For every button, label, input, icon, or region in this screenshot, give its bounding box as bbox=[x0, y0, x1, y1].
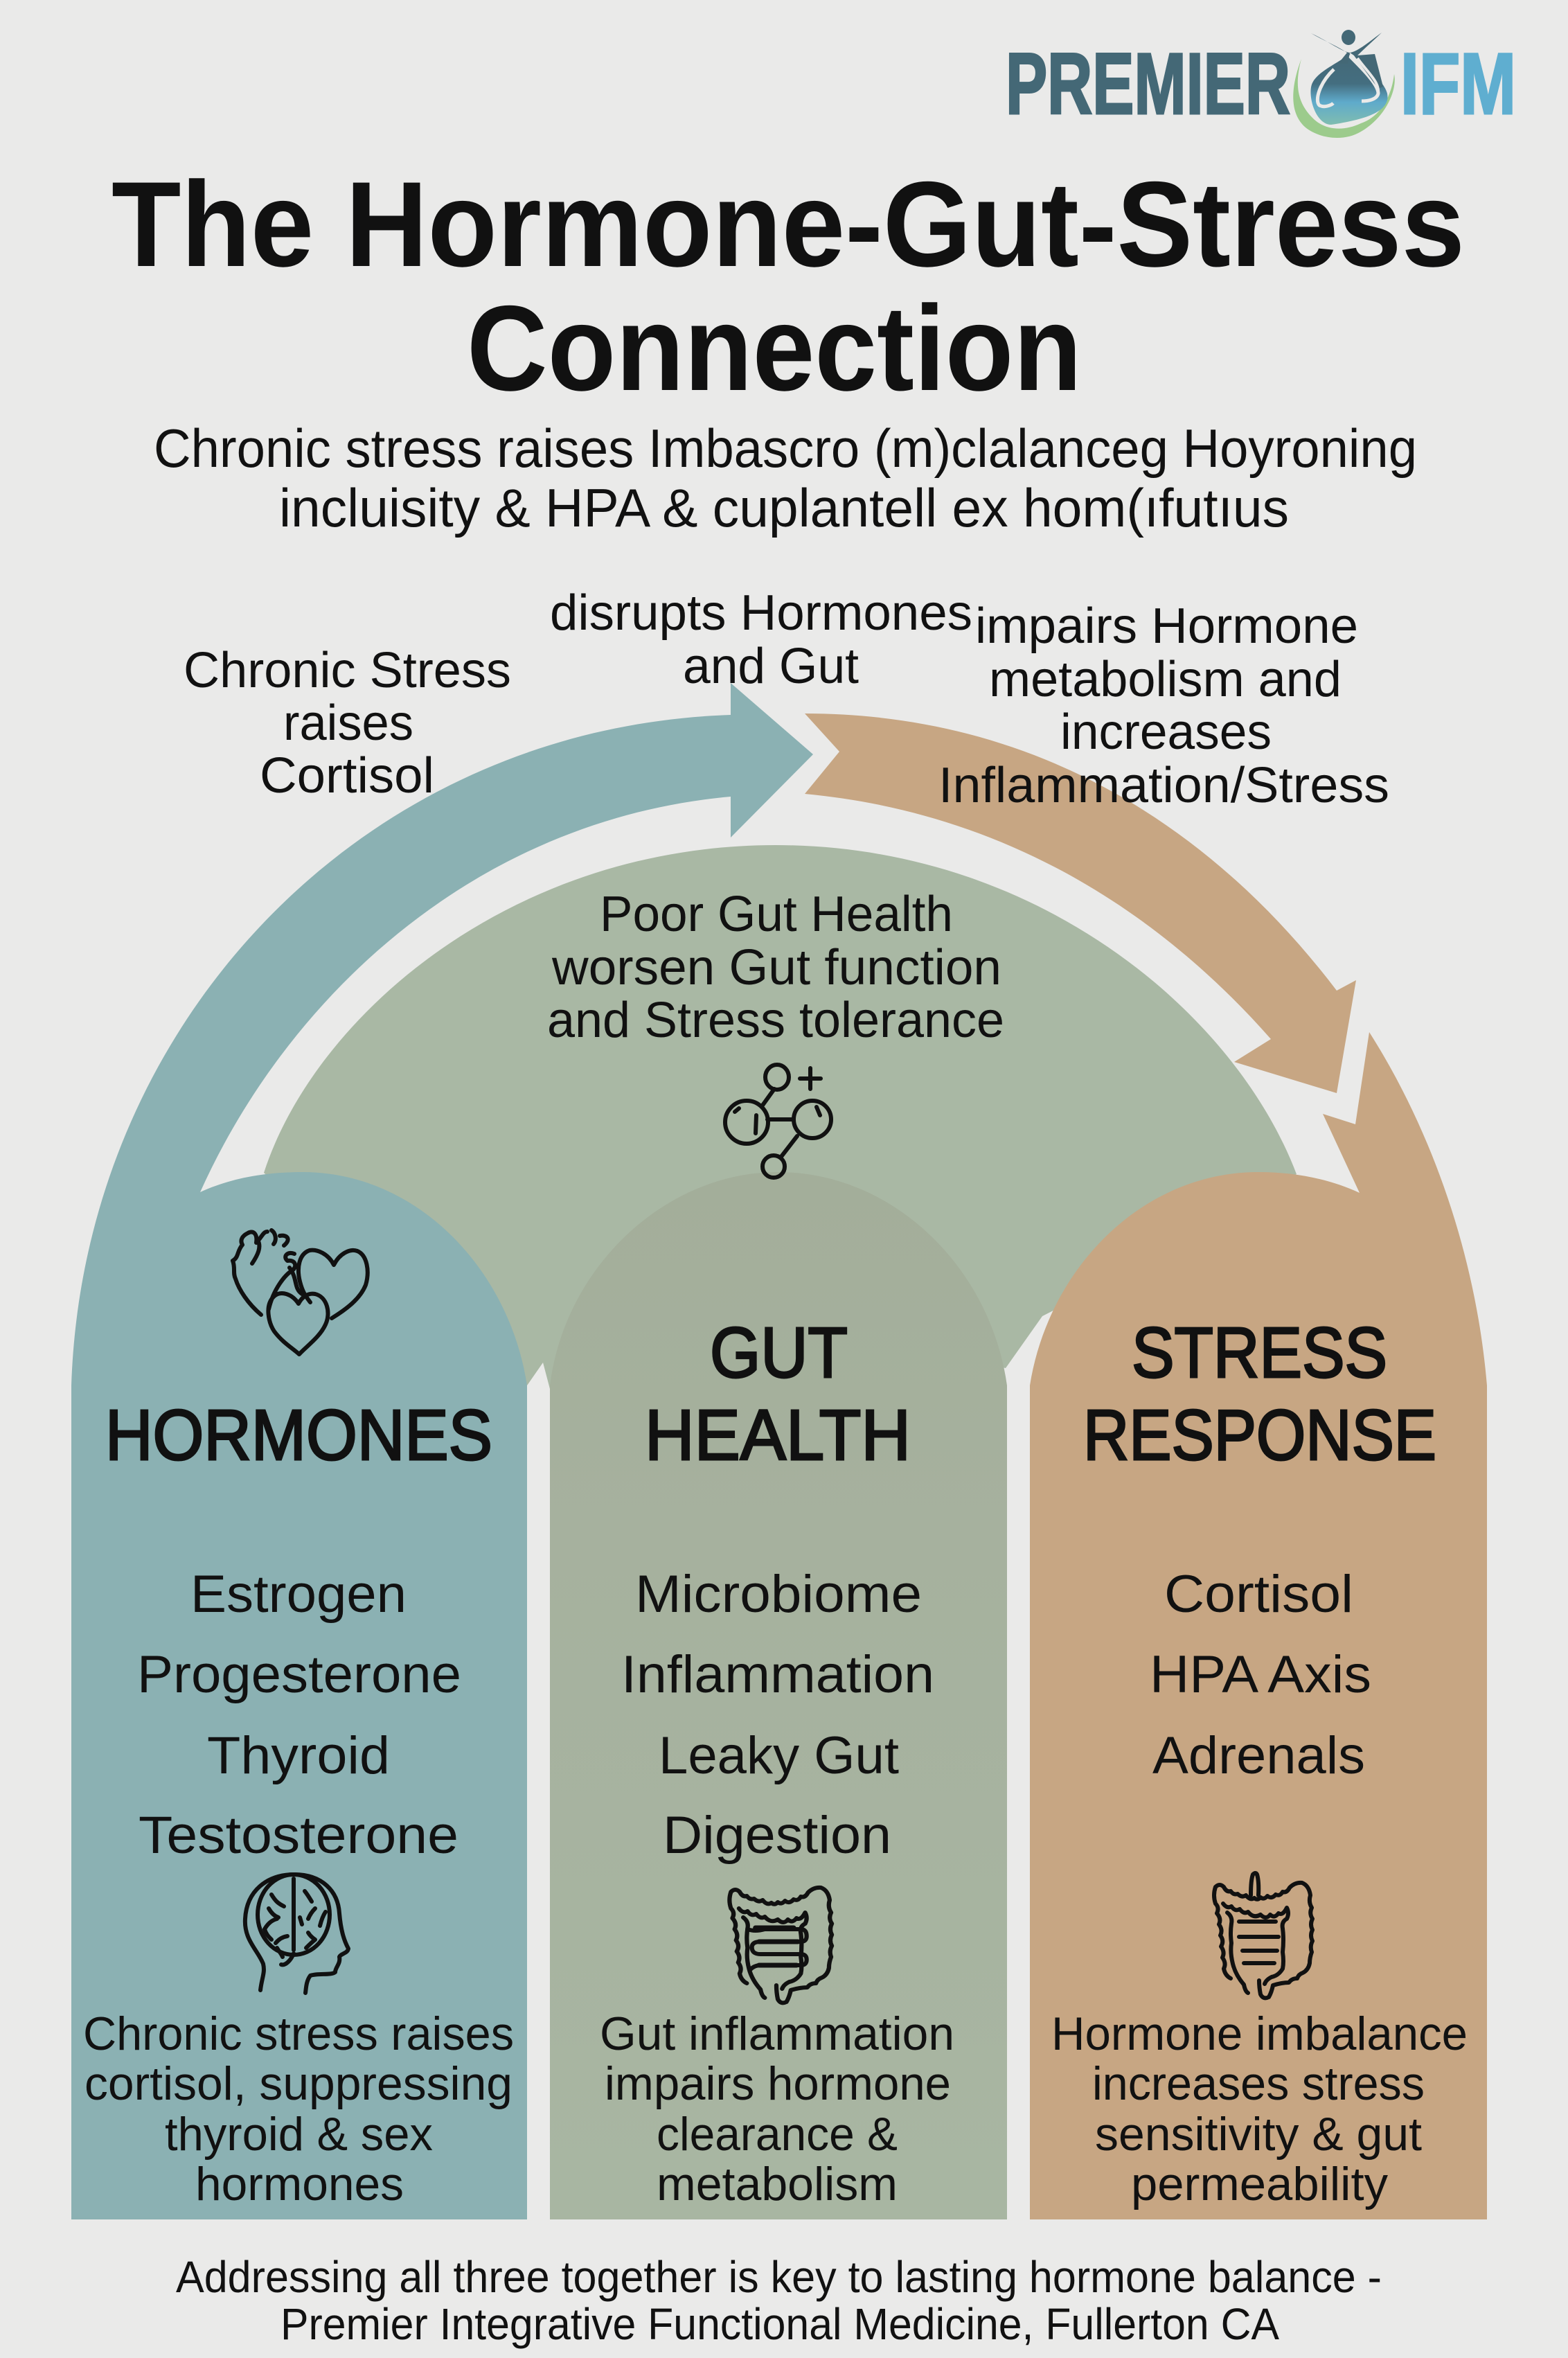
heading: hormones: HORMONES bbox=[105, 1395, 492, 1475]
footer: Premier Integrative Functional Medicine, Fullerton CA bbox=[280, 2299, 1279, 2349]
list: stress response: Cortisol bbox=[1164, 1565, 1353, 1624]
list: gut health: Microbiome bbox=[635, 1565, 922, 1624]
label: chronic stress raises cortisol bbox=[184, 643, 511, 804]
heading: stress response bbox=[1083, 1313, 1436, 1475]
title: Connection bbox=[467, 281, 1082, 416]
icon: logo figure and drop bbox=[1293, 30, 1395, 138]
icon: intestines bbox=[729, 1888, 832, 2003]
label: disrupts hormones and gut bbox=[550, 585, 972, 694]
footer: Addressing all three together is key to lasting hormone balance - bbox=[176, 2252, 1382, 2302]
list: hormones: Progesterone bbox=[137, 1645, 461, 1704]
subtitle: Chronic stress raises Imbascro (m)clalanceg Hoyroning bbox=[154, 418, 1417, 479]
list: hormones bbox=[137, 1565, 461, 1865]
list: gut health bbox=[621, 1565, 934, 1865]
label: poor gut health: and Stress tolerance bbox=[547, 993, 1004, 1048]
label: impairs hormone metabolism: Inflammation/Stress bbox=[938, 758, 1389, 813]
label: impairs hormone metabolism: metabolism and bbox=[989, 652, 1342, 707]
description: stress response bbox=[1051, 2007, 1468, 2210]
list: gut health: Leaky Gut bbox=[659, 1726, 899, 1785]
list: gut health: Digestion bbox=[663, 1806, 891, 1865]
description: stress response: increases stress bbox=[1092, 2057, 1425, 2110]
description: stress response: Hormone imbalance bbox=[1051, 2007, 1468, 2060]
description: hormones: hormones bbox=[195, 2158, 404, 2210]
list: hormones: Testosterone bbox=[139, 1806, 458, 1865]
panel: stress response with lower tan arrow bbox=[1030, 1032, 1487, 2219]
label: impairs hormone metabolism: increases bbox=[1060, 704, 1272, 760]
logo: Premier IFM: IFM bbox=[1400, 36, 1516, 132]
subtitle: incluisity & HPA & cuplantell ex hom(ıfutıus bbox=[279, 477, 1289, 538]
list: gut health: Inflammation bbox=[621, 1645, 934, 1704]
label: chronic stress raises cortisol: Chronic Stress bbox=[184, 643, 511, 698]
panel: gut health bbox=[550, 1172, 1007, 2219]
list: stress response: Adrenals bbox=[1152, 1726, 1365, 1785]
label: poor gut health bbox=[547, 887, 1004, 1048]
subtitle bbox=[154, 418, 1417, 538]
label: impairs hormone metabolism bbox=[938, 599, 1389, 813]
heading: gut health: GUT bbox=[710, 1313, 848, 1392]
heading: stress response: STRESS bbox=[1132, 1313, 1387, 1392]
logo: Premier IFM bbox=[1006, 30, 1516, 138]
label: chronic stress raises cortisol: Cortisol bbox=[260, 748, 434, 804]
panel: hormones with teal arrow bbox=[71, 683, 813, 2219]
description: gut health: clearance & bbox=[657, 2108, 898, 2161]
description: stress response: sensitivity & gut bbox=[1095, 2108, 1422, 2161]
list: hormones: Estrogen bbox=[190, 1565, 407, 1624]
central green dome bbox=[264, 845, 1297, 1389]
arrow: tan top arc bbox=[805, 713, 1356, 1093]
heading: stress response: RESPONSE bbox=[1083, 1395, 1436, 1475]
icon: intestines bbox=[1214, 1873, 1312, 1998]
description: hormones: Chronic stress raises bbox=[83, 2007, 514, 2060]
icon: hearts bbox=[233, 1230, 368, 1354]
title bbox=[112, 157, 1465, 416]
label: poor gut health: Poor Gut Health bbox=[600, 887, 953, 942]
description: gut health: Gut inflammation bbox=[600, 2007, 954, 2060]
description: hormones: cortisol, suppressing bbox=[84, 2057, 513, 2110]
list: stress response bbox=[1150, 1565, 1371, 1785]
description: stress response: permeability bbox=[1131, 2158, 1388, 2210]
logo: Premier IFM: PREMIER bbox=[1006, 36, 1290, 132]
description: hormones: thyroid & sex bbox=[165, 2108, 433, 2161]
list: hormones: Thyroid bbox=[207, 1726, 390, 1785]
list: stress response: HPA Axis bbox=[1150, 1645, 1371, 1704]
label: chronic stress raises cortisol: raises bbox=[283, 695, 413, 751]
heading: gut health bbox=[645, 1313, 911, 1475]
title: The Hormone-Gut-Stress bbox=[112, 157, 1465, 292]
description: hormones bbox=[83, 2007, 514, 2210]
icon: brain in head bbox=[245, 1874, 348, 1993]
heading: gut health: HEALTH bbox=[645, 1395, 911, 1475]
description: gut health: metabolism bbox=[657, 2158, 898, 2210]
label: impairs hormone metabolism: impairs Hormone bbox=[975, 599, 1358, 654]
description: gut health: impairs hormone bbox=[605, 2057, 951, 2110]
label: poor gut health: worsen Gut function bbox=[551, 940, 1001, 995]
footer bbox=[176, 2252, 1382, 2349]
icon: molecule bbox=[725, 1065, 831, 1178]
description: gut health bbox=[600, 2007, 954, 2210]
label: disrupts hormones and gut: and Gut bbox=[683, 639, 859, 694]
label: disrupts hormones and gut: disrupts Hormones bbox=[550, 585, 972, 641]
